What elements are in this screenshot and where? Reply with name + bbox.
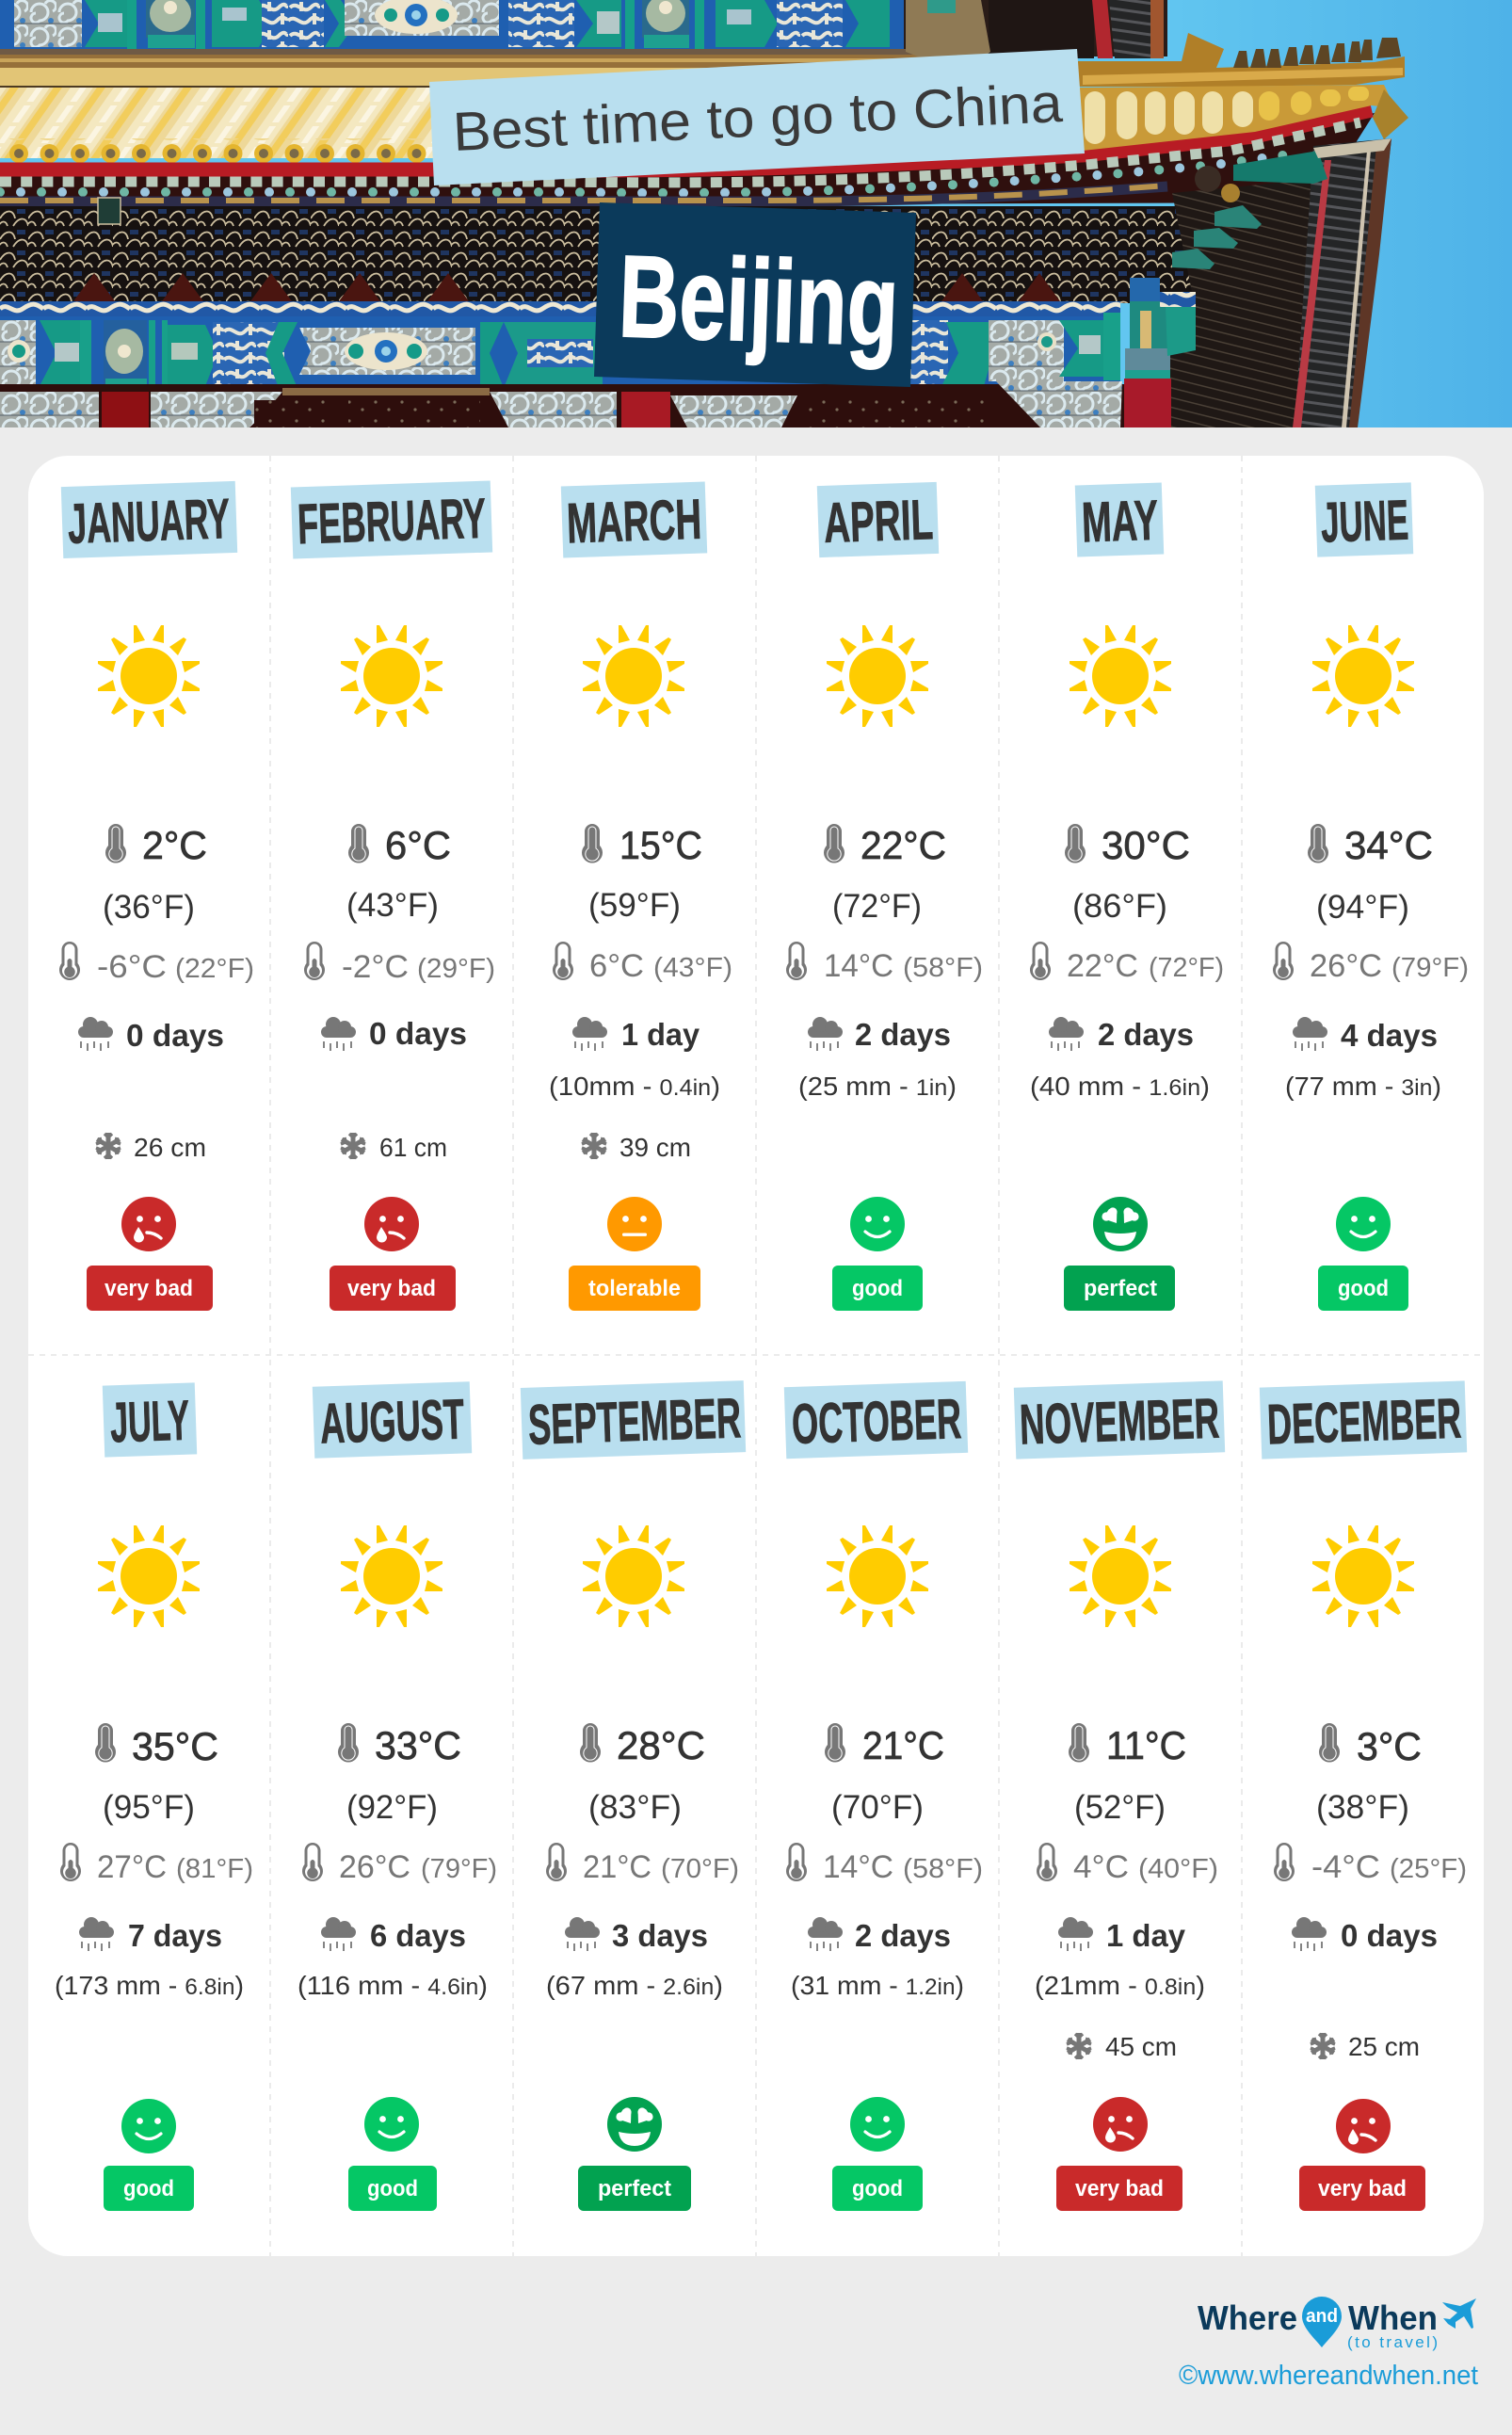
icon: thermometer high [338, 1723, 359, 1763]
icon: sun [98, 625, 200, 727]
rating badge [832, 1266, 923, 1311]
icon: thermometer low [1273, 942, 1294, 980]
high temperature: 34°C [1344, 823, 1433, 867]
rain days: 4 days [1341, 1018, 1438, 1053]
high fahrenheit: (92°F) [346, 1789, 438, 1826]
rain days: 0 days [126, 1018, 224, 1053]
rating badge: very bad [105, 1276, 193, 1301]
header photo: palace roof and sky [0, 0, 1512, 427]
icon: snow [1067, 2033, 1091, 2059]
icon: rain cloud [572, 1017, 607, 1051]
gold and blue strip [0, 186, 1167, 202]
rating badge [1056, 2166, 1182, 2211]
icon: snow [96, 1133, 121, 1159]
icon: rain cloud [565, 1917, 600, 1951]
icon: face perfect [1093, 1197, 1148, 1251]
icon: rain cloud [808, 1017, 843, 1051]
icon: airplane [1442, 2298, 1476, 2329]
icon: face very bad [1336, 2099, 1391, 2153]
snowfall: 26 cm [134, 1133, 206, 1162]
month title: MARCH [566, 488, 702, 555]
month title: FEBRUARY [297, 487, 487, 556]
rain days: 6 days [370, 1918, 466, 1953]
low fahrenheit: (22°F) [175, 954, 254, 984]
low fahrenheit: (25°F) [1390, 1854, 1467, 1884]
top right ornament and dark eave [989, 0, 1094, 58]
icon: thermometer high [1069, 1723, 1089, 1763]
icon: sun [827, 1525, 928, 1627]
month title [313, 1381, 472, 1459]
icon: thermometer high [105, 824, 126, 863]
high fahrenheit: (72°F) [832, 888, 922, 925]
panel: calendar card [28, 456, 1484, 2256]
rating badge: good [367, 2176, 418, 2201]
rating badge: tolerable [588, 1276, 681, 1301]
month title [103, 1382, 197, 1458]
low temperature: 27°C [97, 1849, 167, 1885]
snowfall: 39 cm [619, 1133, 691, 1162]
month title: JUNE [1320, 488, 1409, 555]
rainfall: (10mm - 0.4in) [549, 1072, 720, 1101]
month: May [1030, 482, 1224, 1311]
logo word: Where: Where [1198, 2298, 1297, 2337]
rainfall: (116 mm - 4.6in) [298, 1971, 488, 2000]
low fahrenheit: (58°F) [903, 953, 983, 983]
month: January [59, 481, 254, 1311]
icon: sun [827, 625, 928, 727]
low fahrenheit: (43°F) [653, 953, 732, 983]
rainfall: (67 mm - 2.6in) [546, 1971, 723, 2000]
icon: thermometer low [553, 942, 573, 980]
icon: thermometer low [1030, 942, 1051, 980]
icon: face good [850, 2097, 905, 2152]
month title [561, 481, 707, 557]
icon: thermometer low [546, 1843, 567, 1881]
low temperature: -4°C [1311, 1849, 1380, 1885]
low fahrenheit: (70°F) [661, 1854, 739, 1884]
month title [521, 1380, 746, 1459]
month title: OCTOBER [791, 1387, 962, 1456]
top painted frieze [0, 0, 904, 49]
low fahrenheit: (79°F) [1391, 953, 1469, 983]
icon: rain cloud [321, 1017, 356, 1051]
icon: face good [850, 1197, 905, 1251]
rating badge [578, 2166, 691, 2211]
teal beads [0, 153, 1296, 193]
month: April [786, 482, 983, 1311]
month: February [291, 481, 495, 1311]
icon: map pin with and [1302, 2297, 1342, 2347]
low fahrenheit: (72°F) [1149, 953, 1224, 983]
month title [1315, 482, 1413, 557]
icon: thermometer high [95, 1723, 116, 1763]
gold eave band [0, 55, 998, 70]
month title [817, 482, 939, 557]
icon: face very bad [1093, 2097, 1148, 2152]
high temperature: 15°C [619, 823, 702, 867]
lower painted frieze [0, 313, 1120, 392]
low temperature: 26°C [1310, 948, 1382, 984]
website credit: ©www.whereandwhen.net [1179, 2361, 1478, 2391]
icon: thermometer high [825, 1723, 845, 1763]
icon: rain cloud [1292, 1917, 1327, 1951]
month title [1014, 1380, 1225, 1459]
month: November [1014, 1380, 1225, 2211]
dark dougong brackets [0, 206, 1224, 303]
rain days: 7 days [128, 1918, 222, 1953]
icon: rain cloud [808, 1917, 843, 1951]
rating badge: good [1338, 1276, 1389, 1301]
rating badge [1318, 1266, 1408, 1311]
icon: thermometer low [1037, 1843, 1057, 1881]
high temperature: 22°C [861, 823, 946, 867]
rating badge [1299, 2166, 1425, 2211]
rainfall: (173 mm - 6.8in) [55, 1971, 244, 2000]
rainfall: (25 mm - 1in) [798, 1072, 957, 1101]
month: March [549, 481, 732, 1311]
rating badge: very bad [1075, 2176, 1164, 2201]
icon: map pin with and: and [1306, 2306, 1338, 2327]
icon: snow [582, 1133, 606, 1159]
icon: thermometer low [1274, 1843, 1295, 1881]
icon: thermometer high [582, 824, 603, 863]
month title: NOVEMBER [1019, 1387, 1220, 1456]
icon: face good [121, 2099, 176, 2153]
icon: sun [341, 1525, 442, 1627]
rating badge [87, 1266, 213, 1311]
rating badge: perfect [598, 2176, 671, 2201]
yellow glazed tiles [0, 88, 1111, 158]
high temperature: 28°C [617, 1723, 705, 1767]
icon: face very bad [121, 1197, 176, 1251]
title text: Best time to go to China [452, 73, 1065, 163]
icon: thermometer high [1319, 1723, 1340, 1763]
icon: sun [341, 625, 442, 727]
low fahrenheit: (81°F) [176, 1854, 253, 1884]
icon: sun [1312, 625, 1414, 727]
rating badge [330, 1266, 456, 1311]
icon: snow [341, 1133, 365, 1159]
icon: face perfect [607, 2097, 662, 2152]
rating badge: good [852, 2176, 903, 2201]
snowfall: 45 cm [1105, 2032, 1177, 2061]
dark bracket backing under eave [0, 113, 1375, 207]
icon: rain cloud [1293, 1017, 1327, 1051]
right dark eave [1120, 179, 1327, 427]
month: June [1273, 482, 1469, 1311]
month title: SEPTEMBER [527, 1386, 742, 1457]
rainfall: (31 mm - 1.2in) [791, 1971, 964, 2000]
rating badge: perfect [1084, 1276, 1157, 1301]
icon: sun [1070, 625, 1171, 727]
banner: city name [594, 202, 916, 387]
low temperature: 21°C [583, 1849, 651, 1885]
month: August [298, 1381, 497, 2211]
low temperature: 22°C [1067, 948, 1138, 984]
month title [1075, 482, 1164, 557]
low fahrenheit: (79°F) [421, 1854, 497, 1884]
icon: rain cloud [321, 1917, 356, 1951]
month: December [1260, 1380, 1467, 2211]
low fahrenheit: (58°F) [903, 1854, 983, 1884]
high fahrenheit: (86°F) [1072, 888, 1167, 925]
month: October [784, 1381, 983, 2211]
rating badge [1064, 1266, 1175, 1311]
icon: thermometer low [786, 942, 807, 980]
low temperature: -2°C [342, 949, 409, 985]
icon: face good [364, 2097, 419, 2152]
bottom red pillars and carved panels [0, 379, 1171, 427]
icon: sun [1312, 1525, 1414, 1627]
month: September [521, 1380, 746, 2211]
high fahrenheit: (36°F) [103, 889, 195, 926]
icon: sun [98, 1525, 200, 1627]
rain days: 2 days [1098, 1017, 1194, 1052]
snowfall: 25 cm [1348, 2032, 1420, 2061]
rain days: 0 days [1341, 1918, 1438, 1953]
high fahrenheit: (59°F) [588, 887, 681, 924]
icon: sun [583, 625, 684, 727]
low temperature: 14°C [823, 1849, 893, 1885]
rating badge [104, 2166, 194, 2211]
icon: thermometer high [824, 824, 844, 863]
icon: thermometer high [1308, 824, 1328, 863]
logo: Where and When [1198, 2297, 1476, 2351]
right side column block [1125, 278, 1196, 381]
lower blue scroll band [0, 301, 1120, 316]
rainfall: (77 mm - 3in) [1285, 1072, 1441, 1101]
high temperature: 6°C [385, 823, 451, 867]
banner: title [429, 49, 1085, 185]
icon: sun [583, 1525, 684, 1627]
high fahrenheit: (83°F) [588, 1789, 682, 1826]
month title: MAY [1081, 489, 1159, 554]
low temperature: 14°C [824, 948, 893, 984]
month title: AUGUST [319, 1387, 465, 1456]
rating badge: very bad [347, 1276, 436, 1301]
rating badge [348, 2166, 437, 2211]
snowfall: 61 cm [379, 1133, 447, 1162]
rating badge: good [852, 1276, 903, 1301]
high temperature: 21°C [862, 1723, 944, 1767]
rain days: 2 days [855, 1918, 951, 1953]
icon: thermometer low [304, 942, 325, 980]
month title: APRIL [823, 488, 934, 555]
rain days: 3 days [612, 1918, 708, 1953]
low fahrenheit: (29°F) [417, 954, 495, 984]
month title [784, 1381, 968, 1459]
icon: thermometer high [580, 1723, 601, 1763]
month: July [55, 1382, 253, 2211]
high temperature: 35°C [132, 1724, 218, 1768]
rain days: 2 days [855, 1017, 951, 1052]
high fahrenheit: (52°F) [1074, 1789, 1166, 1826]
icon: rain cloud [78, 1017, 113, 1051]
rain days: 1 day [1106, 1918, 1186, 1953]
high fahrenheit: (95°F) [103, 1789, 195, 1826]
white beam squares [0, 122, 1360, 183]
high temperature: 3°C [1357, 1724, 1422, 1768]
logo tagline: (to travel) [1347, 2333, 1438, 2351]
high fahrenheit: (43°F) [346, 887, 439, 924]
month title [61, 481, 237, 558]
rating badge [832, 2166, 923, 2211]
icon: snow [1311, 2033, 1335, 2059]
month title: JANUARY [67, 487, 231, 556]
month title [291, 481, 492, 558]
icon: face very bad [364, 1197, 419, 1251]
rating badge: very bad [1318, 2176, 1407, 2201]
rain days: 0 days [369, 1016, 467, 1051]
icon: thermometer high [1065, 824, 1086, 863]
high fahrenheit: (94°F) [1316, 889, 1409, 926]
right gold roof tile ends [1078, 85, 1395, 151]
red beam [0, 110, 1372, 170]
low temperature: 26°C [339, 1849, 410, 1885]
icon: thermometer low [302, 1843, 323, 1881]
logo word: When: When [1348, 2298, 1438, 2337]
high fahrenheit: (38°F) [1316, 1789, 1409, 1826]
high temperature: 11°C [1106, 1723, 1186, 1767]
rating badge: good [123, 2176, 174, 2201]
high temperature: 33°C [375, 1723, 461, 1767]
icon: face tolerable [607, 1197, 662, 1251]
icon: thermometer low [786, 1843, 807, 1881]
gold ridge with roof figures [1078, 33, 1405, 87]
low temperature: -6°C [97, 949, 167, 985]
icon: thermometer low [60, 1843, 81, 1881]
high temperature: 30°C [1102, 823, 1190, 867]
icon: rain cloud [1058, 1917, 1093, 1951]
high fahrenheit: (70°F) [831, 1789, 924, 1826]
month title: JULY [109, 1389, 190, 1454]
icon: face good [1336, 1197, 1391, 1251]
low temperature: 4°C [1073, 1849, 1129, 1885]
rainfall: (40 mm - 1.6in) [1030, 1072, 1210, 1101]
rating badge [569, 1266, 700, 1311]
icon: rain cloud [79, 1917, 114, 1951]
icon: thermometer high [348, 824, 369, 863]
icon: thermometer low [59, 942, 80, 980]
low temperature: 6°C [589, 948, 644, 984]
low fahrenheit: (40°F) [1138, 1854, 1218, 1884]
icon: rain cloud [1049, 1017, 1084, 1051]
rainfall: (21mm - 0.8in) [1035, 1971, 1205, 2000]
high temperature: 2°C [142, 823, 207, 867]
icon: sun [1070, 1525, 1171, 1627]
city text: Beijing [617, 232, 901, 371]
rain days: 1 day [621, 1017, 700, 1052]
